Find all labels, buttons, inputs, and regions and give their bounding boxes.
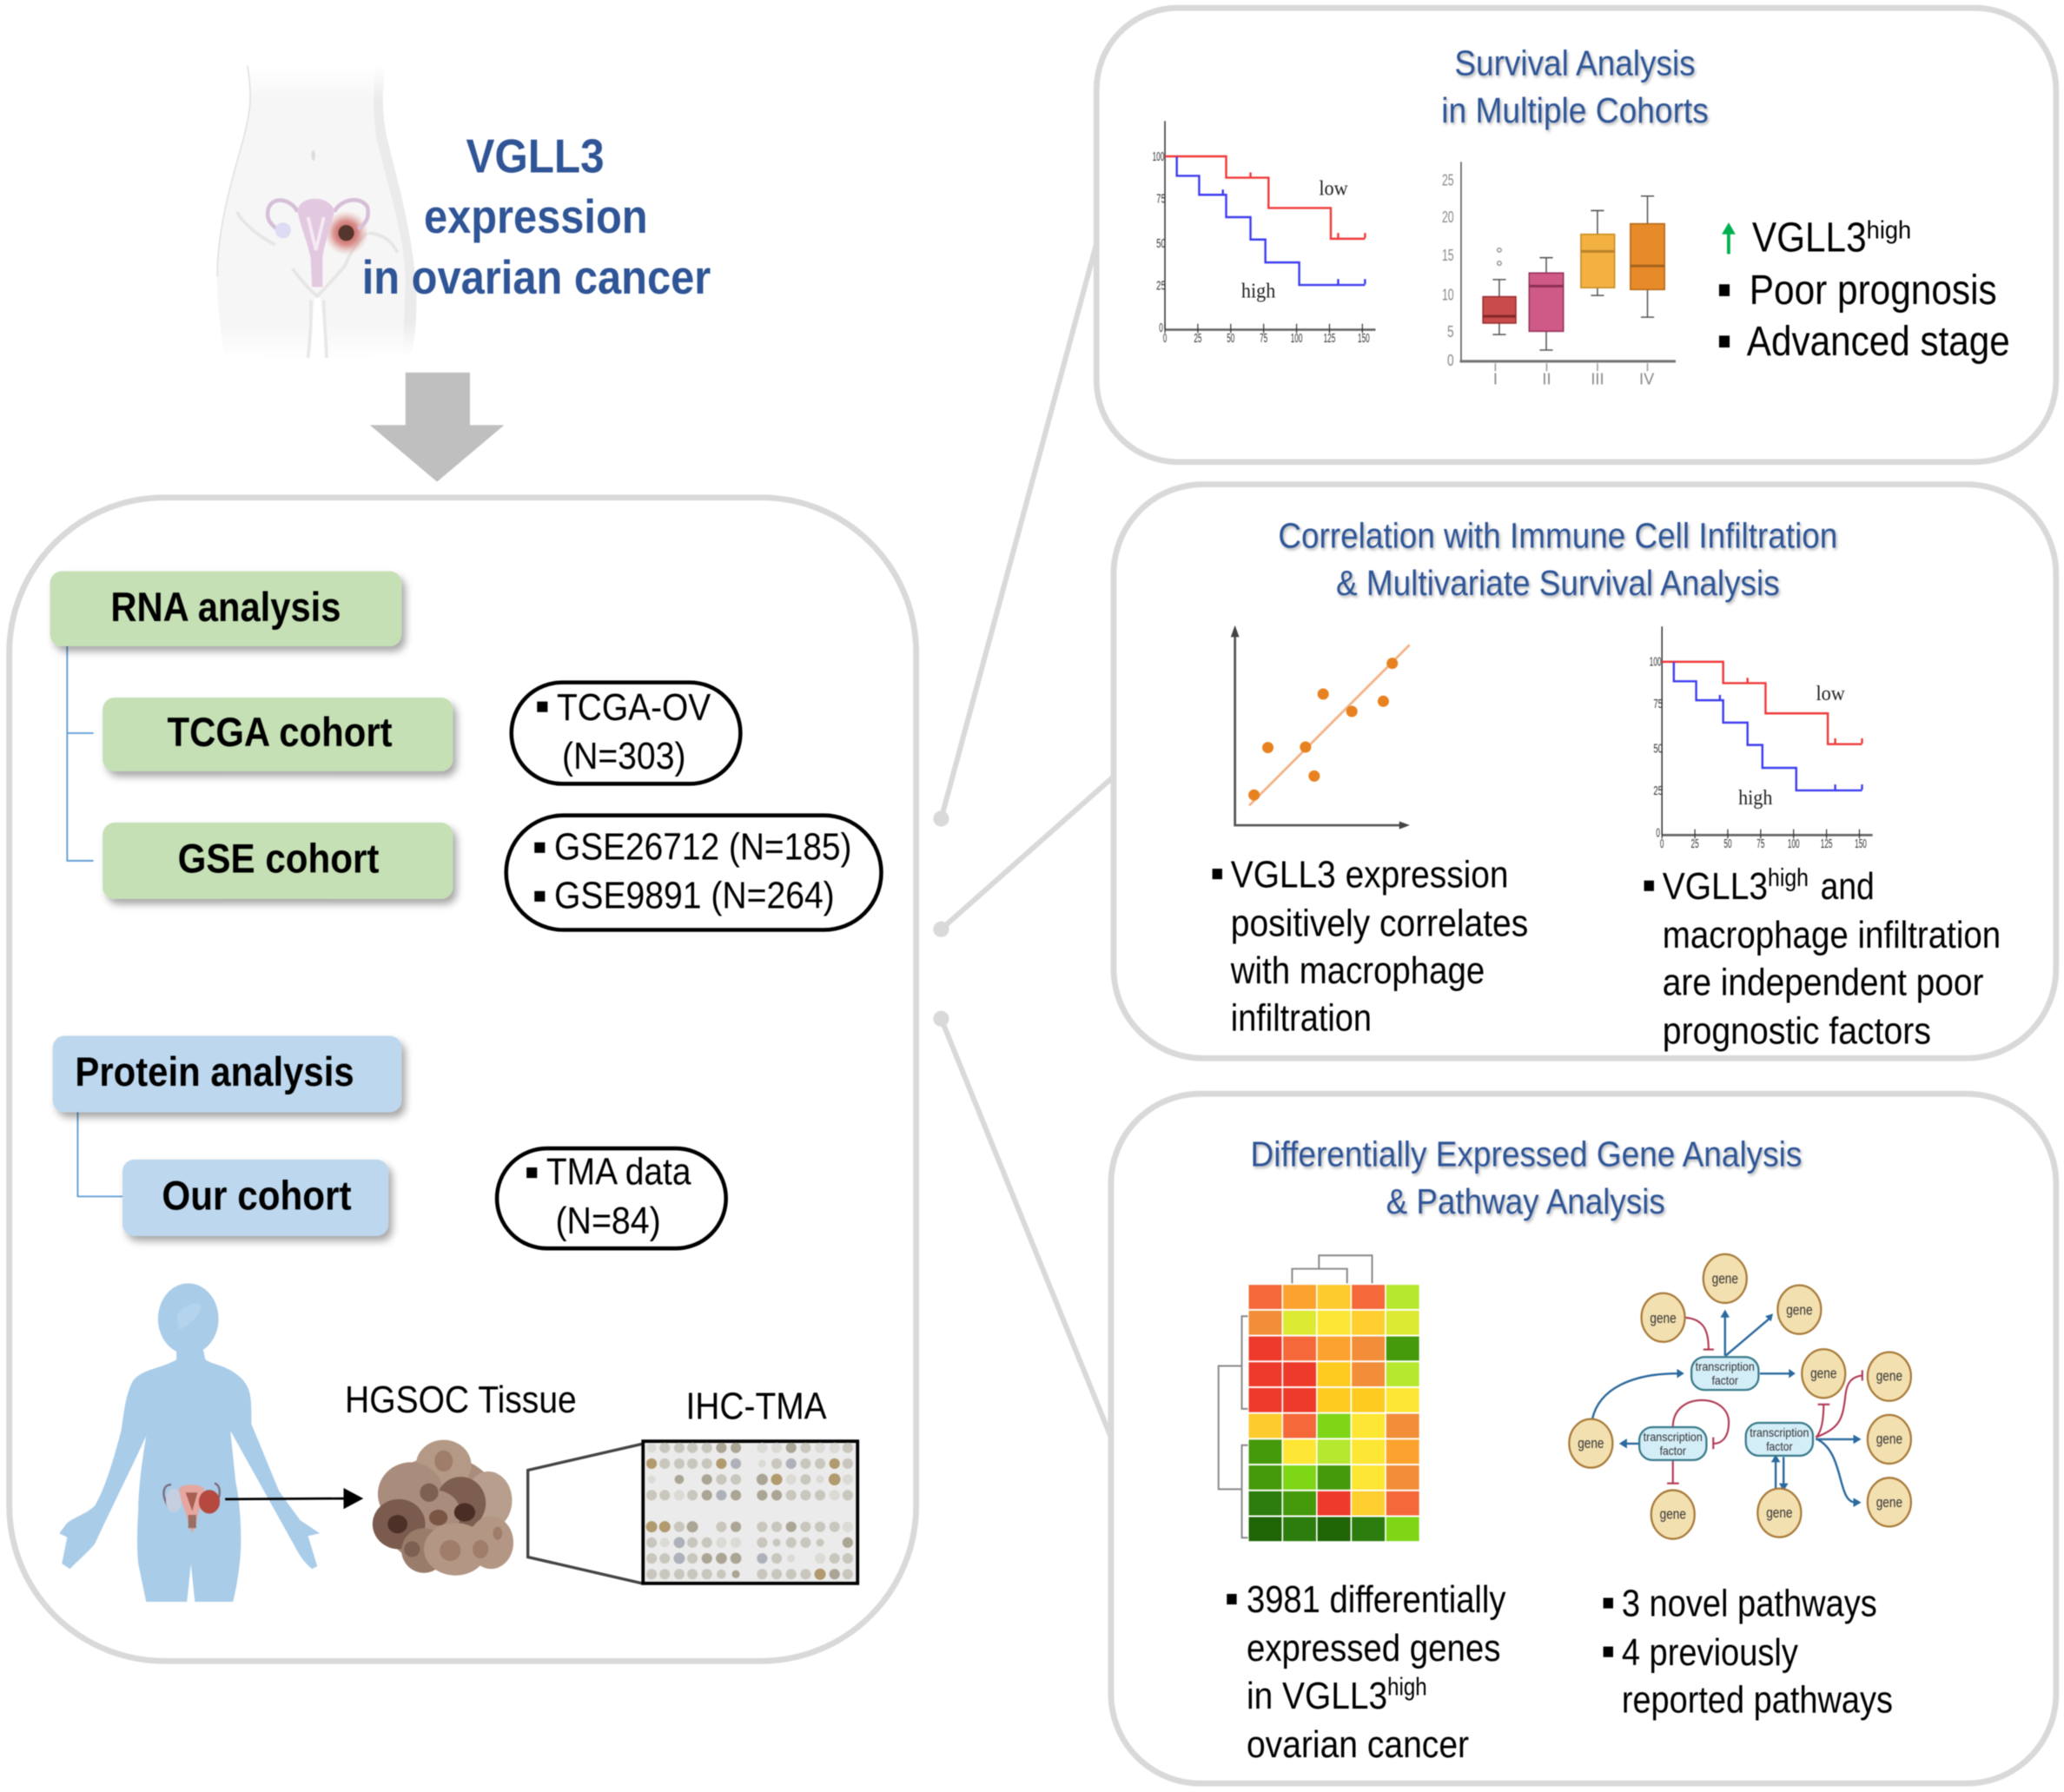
box: RNA analysis: RNA analysis — [110, 584, 341, 630]
chart: box plot by stage: 25 — [1442, 172, 1454, 189]
pill: GSE datasets: GSE9891 (N=264) — [554, 875, 835, 917]
text: pathways: reported pathways — [1622, 1678, 1893, 1721]
title: VGLL3 — [466, 129, 605, 182]
diagram: gene regulatory network: transcription — [1750, 1426, 1809, 1439]
chart: Kaplan-Meier multivariate: 50 — [1723, 836, 1732, 851]
text: pathways — [1604, 1583, 1893, 1721]
chart: Kaplan-Meier multivariate: low — [1816, 682, 1845, 705]
box: RNA analysis — [50, 572, 401, 646]
chart: Kaplan-Meier multivariate: 25 — [1691, 836, 1699, 851]
diagram: gene regulatory network: transcription — [1696, 1360, 1755, 1373]
diagram: gene regulatory network: gene — [1766, 1504, 1793, 1521]
diagram: gene regulatory network: gene — [1876, 1367, 1902, 1384]
text: independent prognostic factors: VGLL3 — [1663, 865, 1768, 908]
diagram: gene regulatory network: gene — [1876, 1494, 1902, 1511]
diagram: gene regulatory network: gene — [1786, 1302, 1813, 1319]
text: prognosis findings: high — [1867, 216, 1911, 244]
title: in ovarian cancer — [362, 251, 711, 304]
chart: box plot by stage: 5 — [1447, 323, 1454, 341]
box: Protein analysis — [53, 1035, 401, 1112]
heading: gene analysis: Differentially Expressed Gene Analysis — [1251, 1134, 1802, 1174]
chart: Kaplan-Meier multivariate: 75 — [1756, 836, 1764, 851]
label: IHC-TMA: IHC-TMA — [685, 1385, 827, 1427]
pill: TMA data: TMA data — [546, 1151, 691, 1194]
text: independent prognostic factors: prognostic factors — [1663, 1010, 1931, 1053]
chart: Kaplan-Meier multivariate: 125 — [1821, 836, 1832, 851]
zoom lines: tissue to array — [528, 1444, 642, 1584]
pill: GSE datasets: GSE26712 (N=185) — [554, 825, 851, 868]
chart: box plot by stage: III — [1591, 370, 1604, 387]
text: pathways: 3 novel pathways — [1622, 1583, 1877, 1625]
diagram: gene regulatory network: factor — [1766, 1440, 1793, 1453]
chart: Kaplan-Meier multivariate: 25 — [1653, 784, 1663, 798]
diagram: gene regulatory network — [1569, 1254, 1911, 1539]
chart: Kaplan-Meier survival curves: 50 — [1156, 236, 1166, 251]
text: prognosis findings — [1719, 214, 2010, 365]
arrow: uterus to tissue — [225, 1488, 363, 1509]
title — [362, 129, 711, 304]
chart: Kaplan-Meier survival curves: high — [1241, 279, 1275, 302]
diagram: gene regulatory network: gene — [1650, 1310, 1677, 1326]
text: independent prognostic factors: macrophage infiltration — [1663, 914, 2001, 956]
box: Our cohort: Our cohort — [162, 1173, 352, 1219]
diagram: gene regulatory network: factor — [1712, 1374, 1738, 1387]
diagram: gene regulatory network: gene — [1876, 1431, 1902, 1447]
text: independent prognostic factors: and — [1821, 865, 1875, 908]
heading: gene analysis: & Pathway Analysis — [1386, 1181, 1665, 1221]
chart: Kaplan-Meier survival curves: 125 — [1324, 331, 1335, 346]
text: correlation finding — [1213, 853, 1528, 1039]
panel: RNA and protein analysis — [10, 498, 916, 1661]
chart: Kaplan-Meier survival curves: 0 — [1163, 331, 1167, 346]
chart: Kaplan-Meier multivariate: high — [1738, 786, 1772, 810]
chart: Kaplan-Meier survival curves: 25 — [1194, 331, 1201, 346]
heading: survival analysis: in Multiple Cohorts — [1441, 90, 1709, 130]
chart: box plot by stage: 20 — [1442, 208, 1454, 226]
arrow: down to analysis panel — [370, 373, 504, 482]
chart: Kaplan-Meier multivariate: 100 — [1650, 655, 1661, 670]
text: independent prognostic factors: are independent poor — [1663, 962, 1984, 1004]
chart: box plot by stage: I — [1493, 370, 1498, 387]
diagram: gene regulatory network: gene — [1810, 1365, 1836, 1381]
chart: Kaplan-Meier multivariate — [1650, 626, 1873, 851]
text: differentially expressed genes: ovarian cancer — [1247, 1723, 1469, 1766]
diagram: gene regulatory network: transcription — [1644, 1431, 1703, 1444]
chart: Kaplan-Meier survival curves: 100 — [1153, 149, 1164, 164]
box: TCGA cohort: TCGA cohort — [167, 709, 393, 755]
heading: survival analysis: Survival Analysis — [1454, 43, 1696, 83]
panel: differential expression — [1111, 1094, 2056, 1783]
chart: Kaplan-Meier survival curves — [1153, 121, 1375, 346]
chart: Kaplan-Meier multivariate: 0 — [1656, 826, 1660, 841]
chart: Kaplan-Meier multivariate: 100 — [1788, 836, 1800, 851]
text: prognosis findings: VGLL3 — [1752, 214, 1867, 261]
box: GSE cohort: GSE cohort — [178, 836, 380, 882]
text: differentially expressed genes: in VGLL3 — [1247, 1675, 1387, 1717]
image: tissue microarray — [643, 1441, 857, 1584]
connector: lines from main panel to result panels — [933, 243, 1114, 1438]
panel: immune infiltration — [1114, 485, 2056, 1058]
chart: Kaplan-Meier survival curves: low — [1319, 176, 1348, 200]
box: Our cohort — [122, 1160, 388, 1236]
chart: Kaplan-Meier survival curves: 150 — [1358, 331, 1370, 346]
text: independent prognostic factors: high — [1768, 864, 1809, 892]
icon: human silhouette with uterus — [59, 1283, 320, 1602]
chart: Kaplan-Meier multivariate: 150 — [1855, 836, 1867, 851]
pill: TCGA-OV: (N=303) — [562, 735, 685, 777]
chart: scatter plot — [1231, 625, 1410, 830]
chart: box plot by stage: IV — [1639, 370, 1655, 387]
chart: Kaplan-Meier multivariate: 0 — [1660, 836, 1664, 851]
diagram: gene regulatory network: gene — [1660, 1506, 1686, 1523]
text: differentially expressed genes — [1227, 1578, 1506, 1766]
heading: immune correlation: & Multivariate Survival Analysis — [1336, 563, 1780, 603]
chart: Kaplan-Meier multivariate: 75 — [1653, 697, 1663, 711]
illustration: female pelvis with ovarian tumour — [217, 66, 416, 360]
chart: Kaplan-Meier survival curves: 25 — [1156, 278, 1166, 293]
chart: box plot by stage: 0 — [1447, 352, 1454, 369]
text: independent prognostic factors — [1644, 864, 2001, 1053]
heading: gene analysis — [1251, 1134, 1802, 1221]
diagram: gene regulatory network: gene — [1712, 1270, 1738, 1286]
box: Protein analysis: Protein analysis — [75, 1048, 354, 1094]
text: correlation finding: infiltration — [1231, 996, 1372, 1039]
text: prognosis findings: Poor prognosis — [1750, 267, 1997, 314]
pill: TMA data — [497, 1148, 726, 1248]
icon: tumour tissue — [373, 1440, 513, 1576]
text: differentially expressed genes: high — [1387, 1674, 1427, 1702]
chart: Kaplan-Meier survival curves: 100 — [1291, 331, 1302, 346]
chart: Kaplan-Meier survival curves: 75 — [1260, 331, 1267, 346]
text: differentially expressed genes: expressed genes — [1247, 1627, 1500, 1670]
pill: TMA data: (N=84) — [555, 1200, 661, 1242]
diagram: gene regulatory network: factor — [1660, 1445, 1686, 1458]
chart: box plot by stage: 15 — [1442, 247, 1454, 264]
pill: TCGA-OV — [512, 683, 740, 784]
label: HGSOC Tissue: HGSOC Tissue — [345, 1379, 577, 1421]
title: expression — [424, 190, 648, 243]
chart: Kaplan-Meier survival curves: 0 — [1159, 321, 1163, 335]
pill: TCGA-OV: TCGA-OV — [557, 686, 711, 729]
panel: survival analysis — [1096, 8, 2056, 462]
icon: green up arrow — [1722, 222, 1736, 254]
chart: box plot by stage — [1442, 162, 1676, 387]
heading: survival analysis — [1441, 43, 1709, 130]
tree lines: protein analysis — [77, 1112, 122, 1196]
chart: Kaplan-Meier survival curves: 75 — [1156, 191, 1166, 206]
chart: Kaplan-Meier survival curves: 50 — [1227, 331, 1234, 346]
chart: Kaplan-Meier multivariate: 50 — [1653, 742, 1663, 757]
heading: immune correlation — [1278, 515, 1837, 603]
pill: GSE datasets — [506, 816, 882, 930]
diagram: gene regulatory network: gene — [1578, 1435, 1604, 1451]
heading: immune correlation: Correlation with Immune Cell Infiltration — [1278, 515, 1837, 555]
box: GSE cohort — [103, 823, 453, 899]
text: correlation finding: positively correlates — [1231, 902, 1528, 944]
box: TCGA cohort — [103, 698, 453, 771]
text: correlation finding: VGLL3 expression — [1231, 853, 1509, 896]
text: differentially expressed genes: 3981 differentially — [1247, 1578, 1506, 1621]
chart: box plot by stage: 10 — [1442, 286, 1454, 303]
tree lines: RNA analysis — [67, 646, 94, 861]
chart: heatmap with dendrograms — [1219, 1255, 1419, 1541]
text: prognosis findings: Advanced stage — [1747, 318, 2010, 365]
text: pathways: 4 previously — [1622, 1631, 1798, 1674]
text: correlation finding: with macrophage — [1230, 949, 1485, 992]
chart: box plot by stage: II — [1542, 370, 1551, 387]
